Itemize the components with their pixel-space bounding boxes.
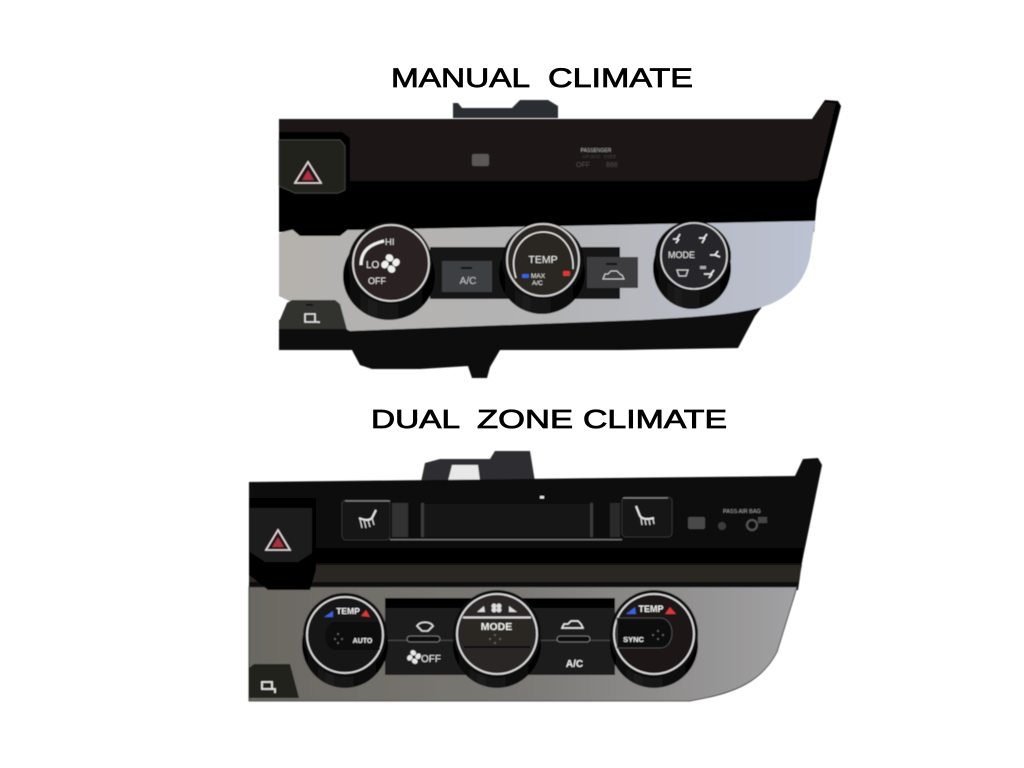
knob: fan speed: [343, 222, 435, 320]
fan off: [406, 649, 422, 665]
black upper fascia: [279, 100, 841, 232]
knob: right temperature: SYNC: [623, 635, 644, 644]
recirculation button: [587, 257, 638, 288]
center button panel: [385, 598, 615, 675]
knob: temperature: MAX: [531, 273, 546, 280]
title: manual climate: CLIMATE: [548, 63, 693, 93]
title: dual zone climate: DUAL: [371, 404, 460, 434]
knob: left temperature: AUTO: [353, 638, 373, 645]
hazard button: [279, 132, 350, 236]
knob: temperature: A/C: [532, 280, 543, 287]
lower housing: [279, 303, 765, 378]
button housing: [279, 132, 350, 236]
title: dual zone climate: CLIMATE: [583, 404, 727, 434]
A/C band and button: [430, 247, 620, 299]
shadow groove: [279, 181, 815, 200]
knob: left temperature: TEMP: [336, 606, 360, 616]
title: dual zone climate: [371, 404, 727, 434]
knob: fan speed: OFF: [368, 276, 386, 286]
speed arc: [361, 241, 384, 265]
left seat heater button: [342, 500, 390, 540]
display window: [390, 496, 622, 540]
knob: fan speed: HI: [385, 237, 394, 248]
right seat heater button: [622, 497, 672, 537]
title: manual climate: MANUAL: [391, 63, 530, 93]
silver trim plate: [249, 587, 797, 701]
hazard button: [249, 498, 316, 590]
panel: manual climate control unit: [279, 100, 841, 378]
knob: mode: [453, 590, 541, 688]
A/C label: A/C: [566, 659, 583, 670]
A/C band and button: A/C: [460, 276, 476, 287]
passenger airbag indicator: PASS AIR BAG: [723, 509, 761, 515]
front defrost icon: [417, 622, 433, 631]
button face: [279, 140, 345, 193]
rear mounting clips: [453, 100, 558, 118]
knob: right temperature: [610, 590, 698, 688]
rear defrost button: [249, 664, 299, 698]
passenger airbag indicator: [688, 509, 767, 530]
knob: left temperature: [302, 593, 388, 688]
fan icon: [379, 252, 402, 275]
knob: mode: MODE: [481, 621, 512, 633]
rear mounting clips: [421, 451, 535, 482]
airbag labels: PASSENGER: [581, 148, 612, 154]
title: dual zone climate: ZONE: [477, 404, 573, 434]
recirculation icon: [562, 621, 583, 628]
airbag indicator: OFF: [576, 162, 590, 169]
airbag indicator: AIR BAG: [582, 154, 601, 159]
hazard triangle: [295, 162, 321, 183]
knob: mode: MODE: [668, 250, 695, 260]
title: manual climate: [391, 63, 693, 93]
lower fascia band: [249, 565, 802, 582]
silver trim plate: [279, 221, 815, 331]
glossy top surface: [279, 102, 836, 181]
panel: dual zone climate control unit: [249, 451, 822, 701]
airbag indicator: 888: [606, 162, 618, 169]
knob: temperature: [499, 223, 585, 314]
knob: fan speed: LO: [366, 260, 380, 271]
airbag indicator: [472, 148, 618, 169]
slots: [407, 636, 440, 642]
knob: right temperature: TEMP: [638, 604, 664, 614]
rear defrost button: [279, 300, 347, 348]
black upper fascia: [249, 458, 822, 590]
center button panel: OFF: [421, 654, 441, 665]
knob: temperature: TEMP: [528, 254, 558, 266]
lock icon: [472, 154, 489, 166]
airbag indicator: KNEE: [604, 154, 616, 159]
hazard triangle: [266, 530, 290, 550]
knob: mode: [653, 221, 731, 309]
